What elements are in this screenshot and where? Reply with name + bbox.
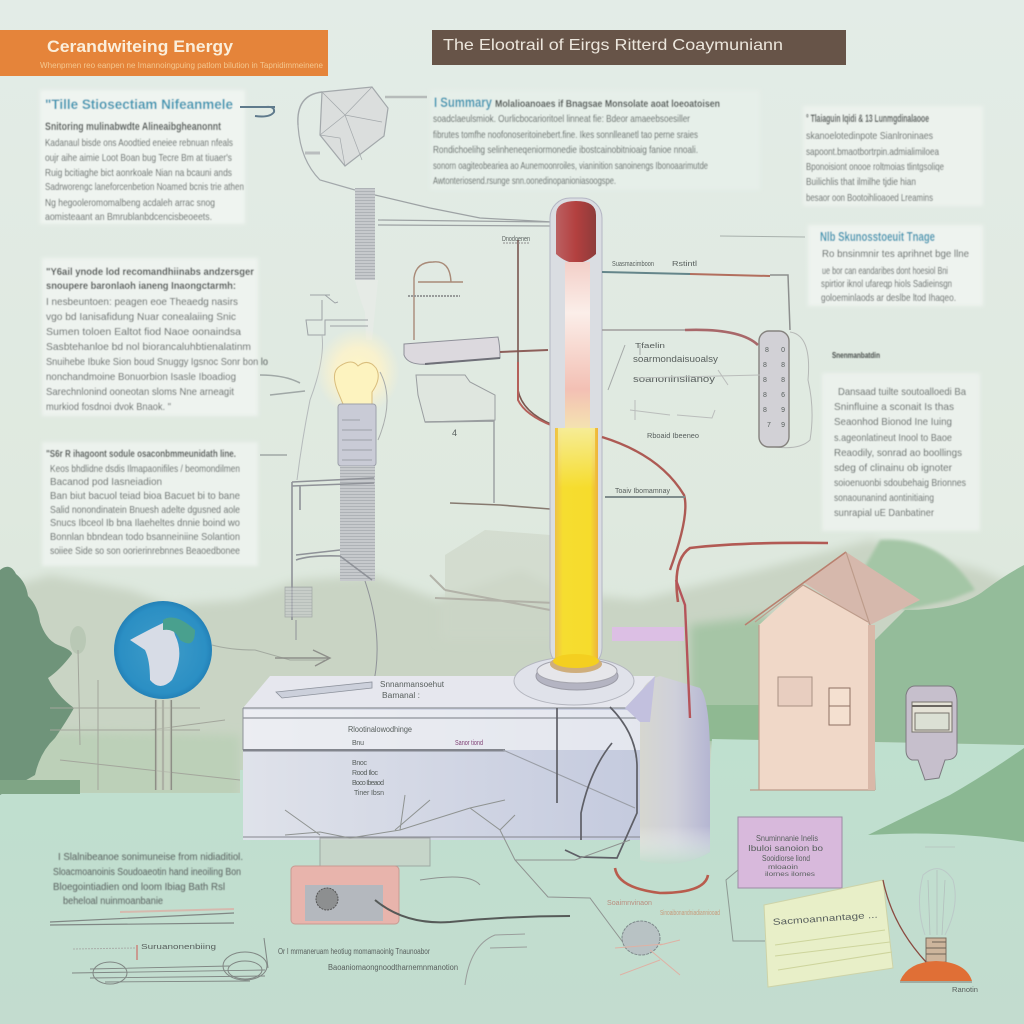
big base box: Boco Ibeaod — [352, 780, 384, 787]
text panel: left 3: Snucs Ibceol Ib bna Ilaeheltes dnnie boind wo — [50, 517, 240, 529]
lamp with orange base — [883, 847, 978, 994]
small labels: Rboaid Ibeeneo — [647, 433, 699, 440]
text block: bottom left: Sloacmoanoinis Soudoaeotin hand ineoiling Bon — [53, 867, 241, 878]
text panel: left 3: soiiee Side so son oorierinrebnnes Beaoedbonee — [50, 545, 240, 557]
misty hills — [0, 540, 1024, 800]
big base box: Rood Iloc — [352, 770, 378, 777]
text panel: right 3: sonaounanind aontinitiaing — [834, 492, 934, 504]
text panel: center — [430, 90, 760, 190]
text panel: right 3: Reaodily, sonrad ao boollings — [834, 447, 962, 459]
purple note: Snuminnanie Inelis — [756, 834, 818, 843]
text panel: center: fibrutes tomfhe noofonoseritoinebert.fine. Ikes sonnlleanetl tao perne sraies — [433, 129, 698, 141]
text panel: left 2: Sarechnlonind ooneotan sloms Nne arneagit — [46, 386, 234, 398]
text panel: right 3: sunrapial uE Danbatiner — [834, 507, 934, 519]
text panel: right 2: Nlb Skunosstoeuit Tnage — [820, 229, 935, 244]
lamp with orange base: Ranotin — [952, 987, 978, 994]
big base box: Bnoc — [352, 760, 368, 767]
text panel: right 1: Bponoisiont onooe roltmoias tlintgsoliqe — [806, 161, 944, 173]
text panel: left 1: Ng hegooleromomalbeng acdaleh arrac snog — [45, 197, 215, 209]
bulb glow — [316, 328, 400, 466]
small meter device — [906, 686, 957, 780]
ground — [0, 739, 1024, 1024]
text panel: left 1: Ruig bcitiaghe bict aonrkoale Nian na bcauni ands — [45, 167, 232, 179]
diagram: coil and wire lines bottom left: Suruanonenbiing — [141, 944, 216, 951]
text panel: right 1: skanoelotedinpote Sianlroninaes — [806, 130, 933, 142]
text panel: right 3: soioenuonbi sdoubehaig Brionnes — [834, 477, 966, 489]
green note: Sacmoannantage ... — [772, 910, 878, 927]
diagram: coil and wire lines bottom left — [50, 909, 458, 984]
text panel: left 3: "S6r R ihagoont sodule osaconbmmeunidath line. — [46, 448, 236, 460]
text panel: right 1: besaor oon Bootoihlioaoed Lreamins — [806, 192, 933, 204]
text panel: right 3: Snenmanbatdin — [832, 351, 880, 360]
thermometer base disc — [514, 654, 634, 705]
text panel: left 1: aomisteaant an Bmrublanbdcencisbeoeets. — [45, 211, 212, 223]
text panel: left 3: Keos bhdlidne dsdis Ilmapaonifiles / beomondilmen — [50, 463, 240, 475]
text panel: right 2: Ro bnsinmnir tes aprihnet bge llne — [822, 248, 969, 260]
thermometer tube — [550, 198, 602, 668]
title banner: center: The Elootrail of Eirgs Ritterd Coaymuniann — [443, 37, 783, 54]
purple note: Sooidiorse liond — [762, 854, 810, 863]
title banner: left — [0, 30, 328, 76]
small plug bottom: Sinoaibonandniadianniooad — [660, 910, 720, 917]
remote device and wires: 8 8 — [763, 362, 785, 369]
remote device and wires: soanoninslianoy — [633, 374, 716, 384]
text panel: left 3 — [42, 442, 258, 566]
text panel: right 3: Seaonhod Bionod Ine Iuing — [834, 416, 952, 428]
globe on pole — [114, 601, 212, 790]
crystal icon and top wires — [298, 87, 553, 226]
text panel: right 2: ue bor can eandaribes dont hoesiol Bni — [822, 265, 948, 277]
text block: bottom left: beheloal nuinmoanbanie — [63, 896, 163, 907]
text panel: left 3: Ban biut bacuol teiad bioa Bacuet bi to bane — [50, 490, 240, 502]
transformer and wires — [404, 236, 553, 426]
text panel: left 2: Snuihebe Ibuke Sion boud Snuggy Igsnoc Sonr bon lo — [46, 356, 268, 368]
text panel: left 2: snoupere baronlaoh ianeng Inaongctarmh: — [46, 280, 236, 292]
text panel: right 1: ° Tlaiaguin Iqidi & 13 Lunmgdinalaooe — [806, 113, 929, 125]
big base box: Rlootinalowodhinge — [348, 725, 413, 734]
text panel: left 2: murkiod fosdnoi dvok Bnaok. " — [46, 401, 171, 413]
text panel: center: soadclaeulsmiok. Ourlicbocarioritoel linneat fie: Bdeor amaeebsoesiller — [433, 113, 690, 125]
arrows left side — [260, 375, 305, 455]
tree left — [0, 567, 80, 795]
purple note: ilornes ilornes — [765, 872, 815, 878]
text panel: right 2: spirtior iknol ufareqp hiols Sadieinsgn — [821, 278, 952, 290]
connector line right — [720, 236, 805, 237]
text panel: right 3: sdeg of clinainu ob ignoter — [834, 462, 952, 474]
text panel: left 2: I nesbeuntoen: peagen eoe Theaedg nasirs — [46, 296, 238, 308]
big base box: Sanor tiond — [455, 740, 483, 747]
title banner: left: Cerandwiteing Energy — [47, 37, 234, 56]
text panel: left 2: vgo bd Ianisafidung Nuar conealaiing Snic — [46, 311, 236, 323]
small labels — [605, 261, 699, 641]
remote device and wires: soarmondaisuoalsy — [633, 354, 719, 364]
text panel: left 2: nonchandmoine Bonuorbion Isasle Iboadiog — [46, 371, 236, 383]
text panel: right 1 — [803, 106, 983, 206]
text panel: left 2: Sasbtehanloe bd nol biorancaluhbtienalatinm — [46, 341, 251, 353]
text panel: center: Awtonteriosend.rsunge snn.oonedinopanioniasoogspe. — [433, 175, 616, 187]
text block: bottom left — [53, 852, 243, 907]
text panel: left 1 — [40, 90, 245, 224]
big base box: Bnu — [352, 740, 364, 747]
big base box: Snnanmansoehut — [380, 680, 445, 689]
right hill — [868, 565, 1024, 842]
text panel: center: Molalioanoaes if Bnagsae Monsolate aoat loeoatoisen — [495, 99, 720, 110]
control unit — [291, 866, 570, 924]
text panel: center: sonorn oagiteobeariea ao Aunemoonroiles, vianinition sanoinengs Ibonoaarimutde — [433, 160, 708, 172]
text panel: left 2 — [42, 258, 268, 416]
lower rig — [275, 466, 377, 690]
small labels: Rstintl — [672, 261, 698, 268]
text block: bottom left: Bloegointiadien ond loom Ibiag Bath Rsl — [53, 882, 225, 893]
text panel: left 1: Sadrworengc laneforcenbetion Noamed bcnis trie athen — [45, 181, 244, 193]
text panel: right 3: Dansaad tuilte soutoalloedi Ba — [838, 386, 966, 398]
remote device and wires: 8 9 — [763, 407, 785, 414]
transformer and wires: Dnodoenen — [502, 236, 530, 243]
small meter arc — [408, 262, 463, 340]
red cable to house — [602, 437, 828, 893]
text panel: left 3: Bacanod pod Iasneiadion — [50, 476, 162, 488]
remote device and wires: 8 0 — [765, 347, 785, 354]
small labels: Toaiv Ibomamnay — [615, 488, 671, 495]
remote device and wires: 8 6 — [763, 392, 785, 399]
text panel: left 1: "Tille Stiosectiam Nifeanmele — [45, 96, 233, 112]
remote device and wires: 7 9 — [767, 422, 785, 429]
green note — [764, 880, 893, 987]
remote device and wires: 8 8 — [763, 377, 785, 384]
text panel: left 2: "Y6ail ynode lod recomandhiinabs andzersger — [46, 266, 254, 278]
text panel: left 1: Snitoring mulinabwdte Alineaibgheanonnt — [45, 121, 221, 133]
title banner: center — [432, 30, 846, 65]
text panel: right 2 — [808, 225, 983, 306]
big base box — [243, 676, 710, 864]
small plug bottom — [465, 900, 720, 985]
diagram: coil and wire lines bottom left: Baoaniomaongnoodtharnemnmanotion — [328, 963, 458, 972]
arrow: hook — [240, 107, 275, 116]
big base box: Tiner Ibsn — [354, 790, 384, 797]
small labels: Suasmacimboon — [612, 261, 654, 268]
title banner: left: Whenpmen reo eanpen ne Imannoingpuing patlom bilution in Tapnidimmeinene — [40, 61, 324, 70]
text panel: left 1: oujr aihe aimie Loot Boan bug Tecre Bm at tiuaer's — [45, 152, 232, 164]
text block: bottom left: I Slalnibeanoe sonimuneise from nidiaditiol. — [58, 852, 243, 863]
text panel: left 3: Bonnlan bbndean todo bsanneiniine Solantion — [50, 531, 240, 543]
text panel: right 2: goloeminlaods ar deslbe ltod Ihaqeo. — [821, 292, 956, 304]
sketch background: left of globe — [50, 626, 325, 790]
text panel: left 3: Salid nonondinatein Bnuesh adelte dgusned aole — [50, 504, 240, 516]
purple note: Ibuloi sanoion bo — [748, 844, 824, 853]
remote device and wires — [602, 272, 812, 448]
small plug bottom: Soaimnvinaon — [607, 900, 652, 907]
text panel: right 3 — [822, 351, 980, 531]
purple note: mloaoin — [768, 865, 798, 871]
house — [745, 552, 920, 790]
purple note — [726, 817, 842, 941]
text panel: center: I Summary — [434, 94, 492, 110]
big base box: Bamanal : — [382, 691, 420, 700]
tower column and small bracket — [297, 188, 378, 480]
text panel: right 1: Builichlis that ilmilhe tjdie hian — [806, 176, 916, 188]
text panel: right 3: s.ageonlatineut Inool to Baoe — [834, 432, 952, 444]
document icon and arm: 4 — [452, 428, 457, 438]
document icon and arm — [416, 375, 555, 610]
branching wires — [285, 795, 630, 945]
text panel: left 2: Sumen toloen Ealtot fiod Naoe oonaindsa — [46, 326, 241, 338]
text panel: center: Rondichoelihg selinheneqeniormonedie ibostcainobitnioaig fanioe nnoali. — [433, 144, 698, 156]
remote device and wires: Tfaelin — [635, 343, 665, 350]
text panel: left 1: Kadanaul bisde ons Aoodtied eneiee rebnuan nfeals — [45, 137, 233, 149]
text panel: right 1: sapoont.bmaotbortrpin.admialimiloea — [806, 146, 939, 158]
diagram: coil and wire lines bottom left: Or I mrmaneruam heotiug momamaoinlg Tnaunoabor — [278, 947, 430, 956]
text panel: right 3: Sninfluine a sconait Is thas — [834, 401, 954, 413]
